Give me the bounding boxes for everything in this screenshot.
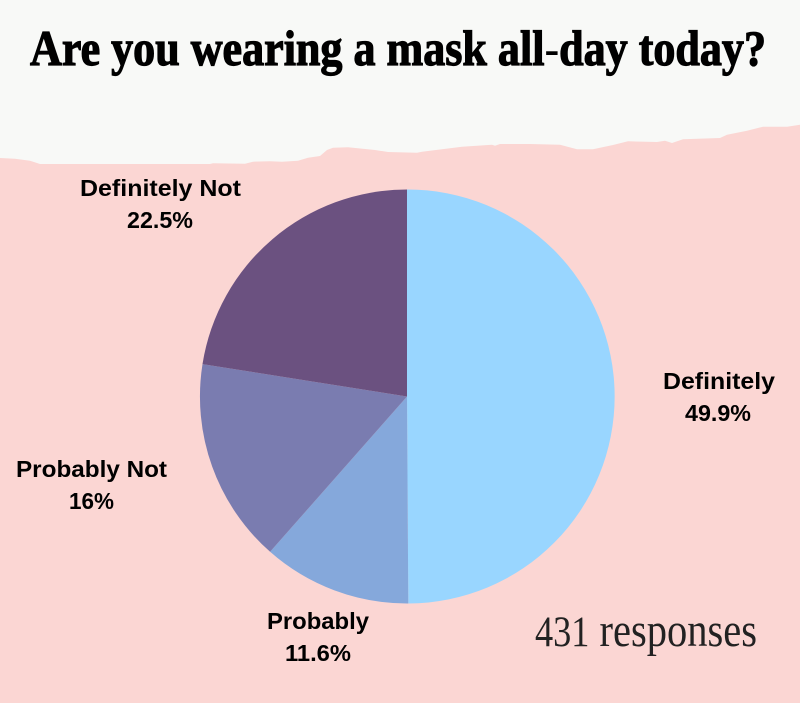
slice: Definitely 49.9% [407, 189, 615, 604]
label: Definitely [663, 368, 775, 426]
response count: 431 responses [535, 604, 757, 657]
label: Definitely: 49.9% [685, 400, 751, 426]
label: Definitely: Definitely [663, 368, 775, 394]
title: Are you wearing a mask all-day today? [30, 20, 766, 76]
slice: Probably Not 16% [200, 364, 407, 552]
label: Probably Not: Probably Not [16, 456, 167, 482]
label: Probably [267, 608, 369, 666]
label: Probably: Probably [267, 608, 369, 634]
label: Probably Not: 16% [69, 488, 114, 514]
slice: Definitely Not 22.5% [202, 190, 407, 396]
label: Definitely Not: 22.5% [127, 207, 193, 233]
label: Probably: 11.6% [285, 640, 351, 666]
label: Probably Not [16, 456, 167, 514]
label: Definitely Not: Definitely Not [80, 175, 241, 201]
pie chart [200, 189, 615, 604]
panel: torn paper header [0, 0, 800, 164]
label: Definitely Not [80, 175, 241, 233]
slice: Probably 11.6% [270, 396, 408, 604]
